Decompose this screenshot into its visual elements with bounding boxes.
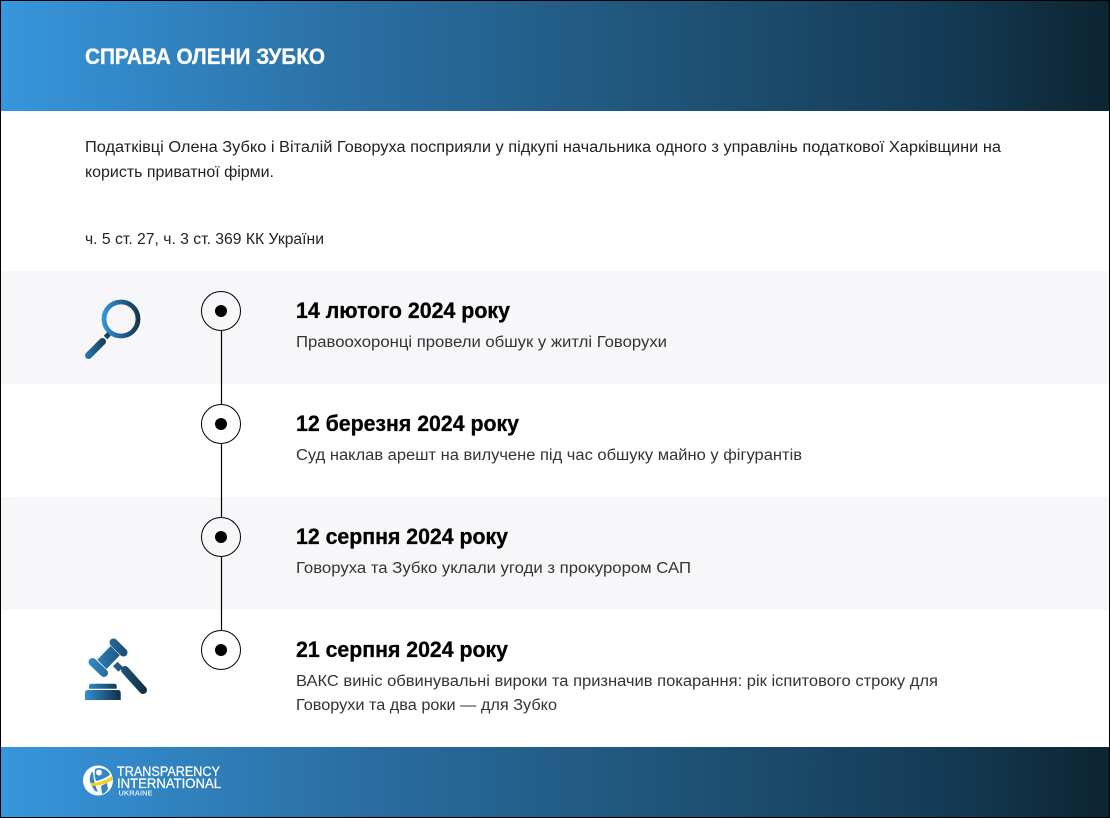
footer band bbox=[1, 747, 1109, 817]
timeline line bbox=[220, 330, 222, 632]
timeline item 1 bbox=[202, 292, 667, 351]
legal articles: ч. 5 ст. 27, ч. 3 ст. 369 КК України bbox=[85, 231, 324, 248]
description 4 bbox=[296, 673, 938, 714]
intro text: користь приватної фірми. bbox=[85, 164, 274, 181]
description 3: Говоруха та Зубко уклали угоди з прокурором САП bbox=[296, 560, 691, 577]
logo wordmark: TRANSPARENCY bbox=[117, 764, 220, 779]
description 1: Правоохоронці провели обшук у житлі Говорухи bbox=[296, 334, 667, 351]
marker 3 bbox=[202, 518, 240, 556]
row backgrounds bbox=[1, 271, 1109, 610]
intro text bbox=[85, 139, 1001, 181]
logo wordmark bbox=[117, 764, 221, 797]
logo wordmark: INTERNATIONAL bbox=[117, 776, 221, 791]
intro text: Податківці Олена Зубко і Віталій Говоруха посприяли у підкупі начальника одного з управлінь податкової Харківщини на bbox=[85, 139, 1001, 156]
description 2: Суд наклав арешт на вилучене під час обшуку майно у фігурантів bbox=[296, 447, 802, 464]
date 1: 14 лютого 2024 року bbox=[296, 298, 511, 323]
logo wordmark: UKRAINE bbox=[118, 790, 153, 797]
timeline item 2 bbox=[202, 404, 802, 464]
marker 4 bbox=[202, 630, 240, 670]
description 4: Говорухи та два роки — для Зубко bbox=[296, 697, 557, 714]
icon: gavel bbox=[85, 642, 143, 700]
marker 1 bbox=[202, 292, 240, 330]
header band bbox=[1, 1, 1109, 111]
title: СПРАВА ОЛЕНИ ЗУБКО bbox=[85, 44, 325, 69]
logo: Transparency International Ukraine bbox=[83, 764, 221, 797]
logo emblem bbox=[83, 766, 113, 796]
description 4: ВАКС виніс обвинувальні вироки та призначив покарання: рік іспитового строку для bbox=[296, 673, 938, 690]
timeline item 3 bbox=[202, 518, 691, 577]
date 3: 12 серпня 2024 року bbox=[296, 524, 509, 549]
icon: magnifying glass bbox=[88, 302, 138, 356]
timeline item 4 bbox=[202, 630, 938, 714]
date 2: 12 березня 2024 року bbox=[296, 411, 520, 436]
date 4: 21 серпня 2024 року bbox=[296, 637, 509, 662]
marker 2 bbox=[202, 404, 240, 444]
